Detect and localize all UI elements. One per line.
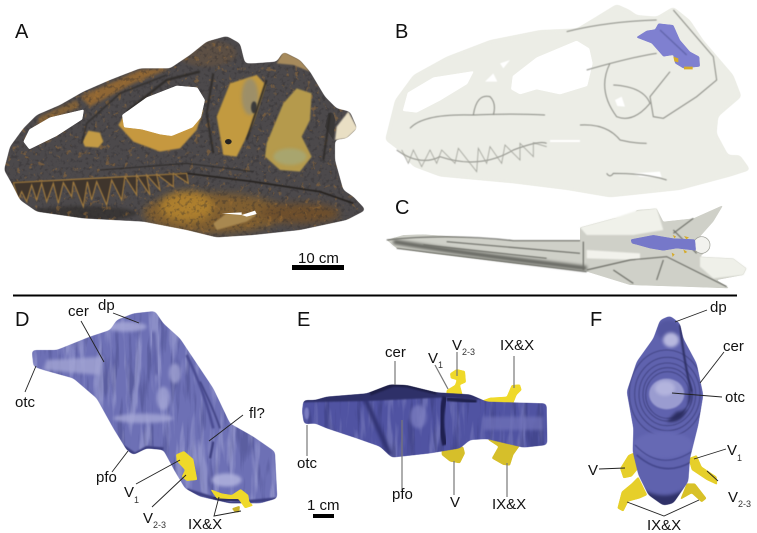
F labels: dp	[710, 299, 727, 316]
E labels: 1	[438, 360, 443, 370]
panel C: transparent skull dorsal	[387, 205, 747, 288]
panel label E: E	[297, 309, 310, 331]
D labels: 2-3	[153, 520, 166, 530]
mandibular fenestra	[222, 211, 257, 217]
F labels: otc	[725, 389, 746, 406]
F labels: V	[727, 442, 737, 459]
D labels: pfo	[96, 469, 117, 486]
E labels: V	[428, 350, 438, 367]
F labels: cer	[723, 338, 744, 355]
E labels: V	[450, 494, 460, 511]
F labels: V	[588, 462, 598, 479]
E labels: IX&X	[500, 337, 534, 354]
E leader lines	[307, 352, 514, 497]
teeth	[13, 173, 188, 207]
panel label D: D	[15, 309, 29, 331]
scale bar 10 cm	[292, 250, 344, 270]
D labels: dp	[98, 297, 115, 314]
panel label A: A	[15, 21, 29, 43]
panel D: endocast lateral	[27, 308, 283, 512]
D labels: V	[143, 510, 153, 527]
D yellow nerves	[176, 451, 253, 512]
E labels: IX&X	[492, 496, 526, 513]
C occipital condyle	[693, 237, 710, 253]
F leader lines	[599, 310, 726, 516]
E labels: pfo	[392, 486, 413, 503]
panel F: endocast posterior	[617, 312, 717, 512]
D labels: cer	[68, 303, 89, 320]
F labels: V	[728, 489, 738, 506]
upper jaw ridge line	[12, 173, 353, 203]
D labels: 1	[134, 495, 139, 505]
divider	[13, 294, 737, 296]
scale bar 1 cm: 1 cm	[307, 497, 340, 514]
lower orange orbit region	[118, 110, 203, 152]
E yellow nerves behind	[442, 369, 522, 466]
lateral temporal orange area	[217, 75, 266, 157]
D leader lines	[25, 313, 243, 516]
E labels: 2-3	[462, 347, 475, 357]
panel A: photographed skull	[0, 33, 370, 240]
F nerves	[617, 450, 717, 512]
E labels	[297, 337, 534, 513]
E labels: otc	[297, 455, 318, 472]
B endocast in skull	[636, 23, 700, 68]
F labels	[588, 299, 751, 533]
D labels: otc	[15, 394, 36, 411]
B fenestrae	[403, 71, 474, 113]
D labels: V	[124, 484, 134, 501]
F labels: 1	[737, 453, 742, 463]
scale bar 10 cm: 10 cm	[298, 250, 339, 267]
D labels	[15, 297, 265, 533]
F labels: 2-3	[738, 499, 751, 509]
panel E: endocast dorsal	[300, 369, 550, 466]
panel label F: F	[590, 309, 602, 331]
E labels: V	[452, 337, 462, 354]
orbit opening	[122, 86, 205, 136]
panel label C: C	[395, 197, 409, 219]
panel label B: B	[395, 21, 408, 43]
C endocast	[631, 235, 696, 251]
E labels: cer	[385, 344, 406, 361]
D labels: fl?	[249, 405, 265, 422]
panel B: transparent skull lateral	[385, 4, 751, 197]
F otic canal disc	[649, 379, 684, 409]
D labels: IX&X	[188, 516, 222, 533]
antorbital fenestra	[23, 109, 84, 149]
